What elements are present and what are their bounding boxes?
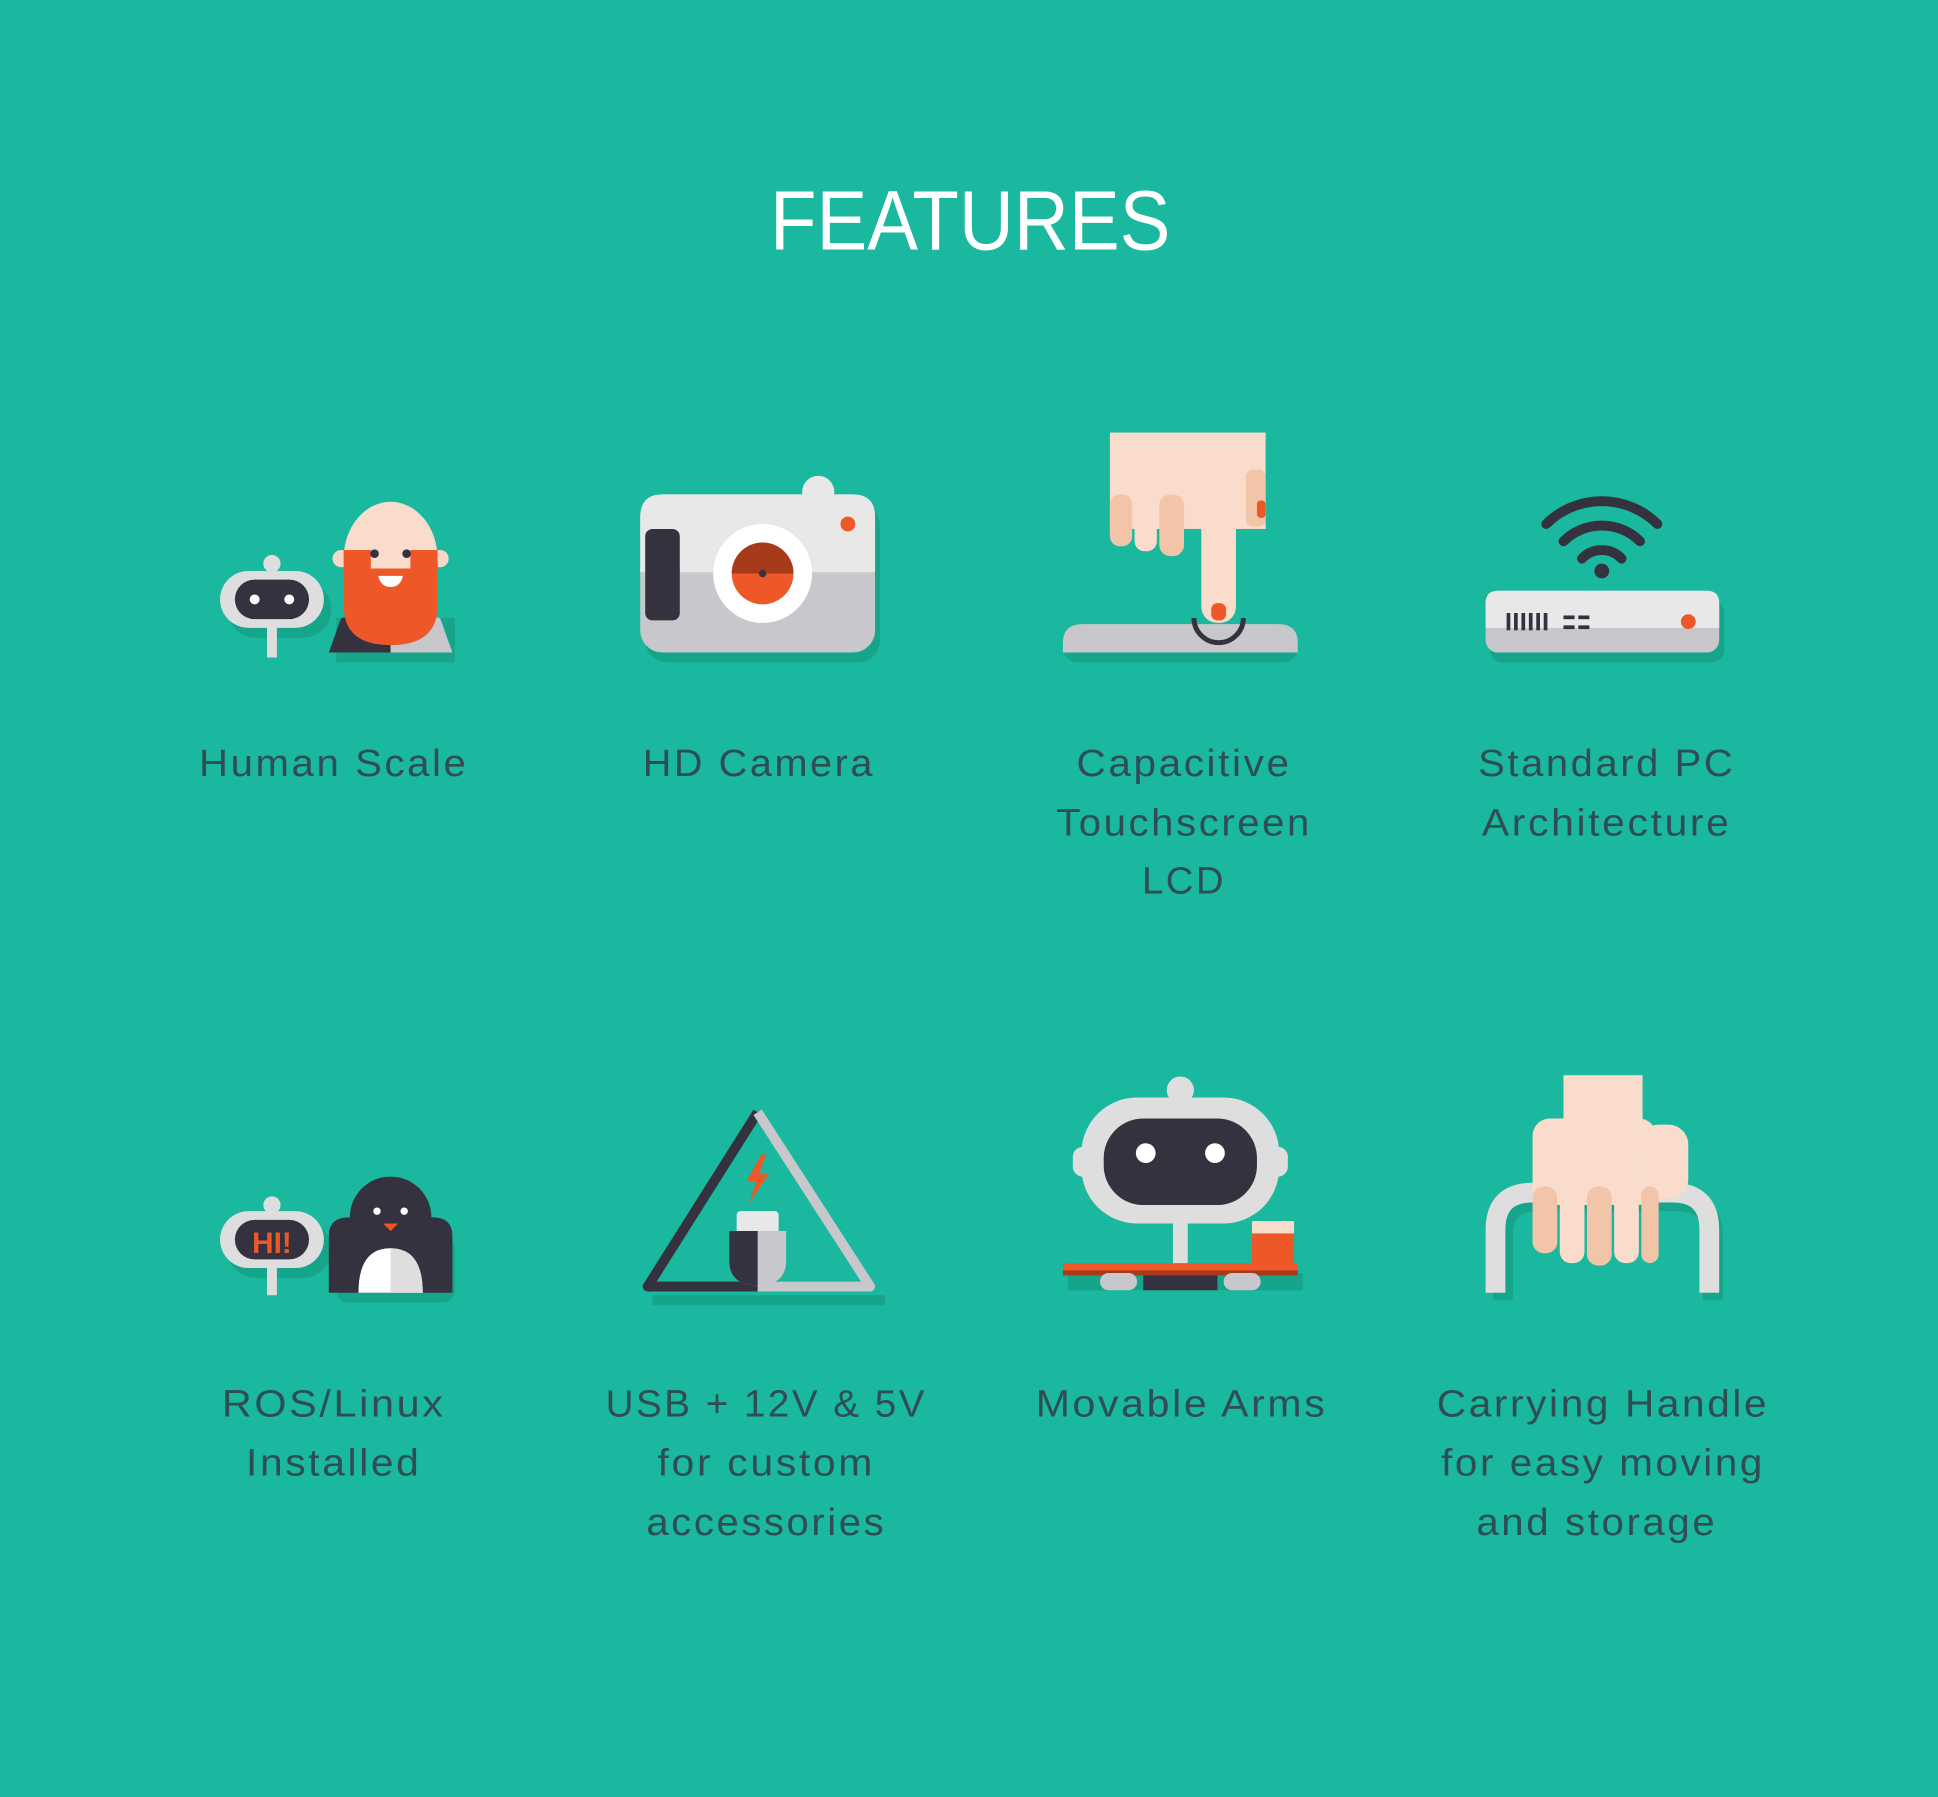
icon: USB power bbox=[648, 1112, 885, 1300]
label: HD Camera: HD Camera bbox=[643, 742, 875, 785]
label: ROS/Linux Installed bbox=[222, 1382, 446, 1485]
label: ROS/Linux Installed: Installed bbox=[246, 1442, 421, 1485]
label: Capacitive Touchscreen LCD bbox=[1056, 742, 1312, 903]
icon: movable arms bbox=[1063, 1076, 1303, 1290]
label: USB + 12V & 5V: accessories bbox=[646, 1501, 886, 1544]
title: FEATURES bbox=[770, 174, 1170, 268]
label: Capacitive Touchscreen LCD: Capacitive bbox=[1077, 742, 1292, 785]
icon: human scale bbox=[220, 502, 455, 662]
label: Capacitive Touchscreen LCD: Touchscreen bbox=[1056, 801, 1312, 844]
label: Carrying Handle bbox=[1437, 1382, 1769, 1544]
icon: standard PC bbox=[1486, 501, 1724, 662]
label: Carrying Handle: for easy moving bbox=[1441, 1442, 1765, 1485]
label: ROS/Linux Installed: ROS/Linux bbox=[222, 1382, 446, 1425]
label: USB + 12V & 5V: USB + 12V & 5V bbox=[606, 1382, 927, 1425]
label: Standard PC Architecture: Architecture bbox=[1482, 801, 1732, 844]
label: Carrying Handle: Carrying Handle bbox=[1437, 1382, 1769, 1425]
icon: ROS/Linux: HI! bbox=[252, 1227, 292, 1260]
label: Standard PC Architecture: Standard PC bbox=[1478, 742, 1735, 785]
icon: carrying handle bbox=[1495, 1075, 1713, 1300]
label: Capacitive Touchscreen LCD: LCD bbox=[1142, 860, 1226, 903]
label: USB + 12V & 5V: for custom bbox=[658, 1442, 875, 1485]
label: Human Scale: Human Scale bbox=[199, 742, 468, 785]
label: Carrying Handle: and storage bbox=[1476, 1501, 1717, 1544]
label: Movable Arms: Movable Arms bbox=[1036, 1382, 1327, 1425]
label: USB + 12V & 5V bbox=[606, 1382, 927, 1544]
icon: HD camera bbox=[640, 476, 880, 662]
icon: ROS/Linux bbox=[220, 1177, 455, 1303]
label: Standard PC Architecture bbox=[1478, 742, 1735, 844]
icon: capacitive touchscreen bbox=[1063, 433, 1298, 662]
